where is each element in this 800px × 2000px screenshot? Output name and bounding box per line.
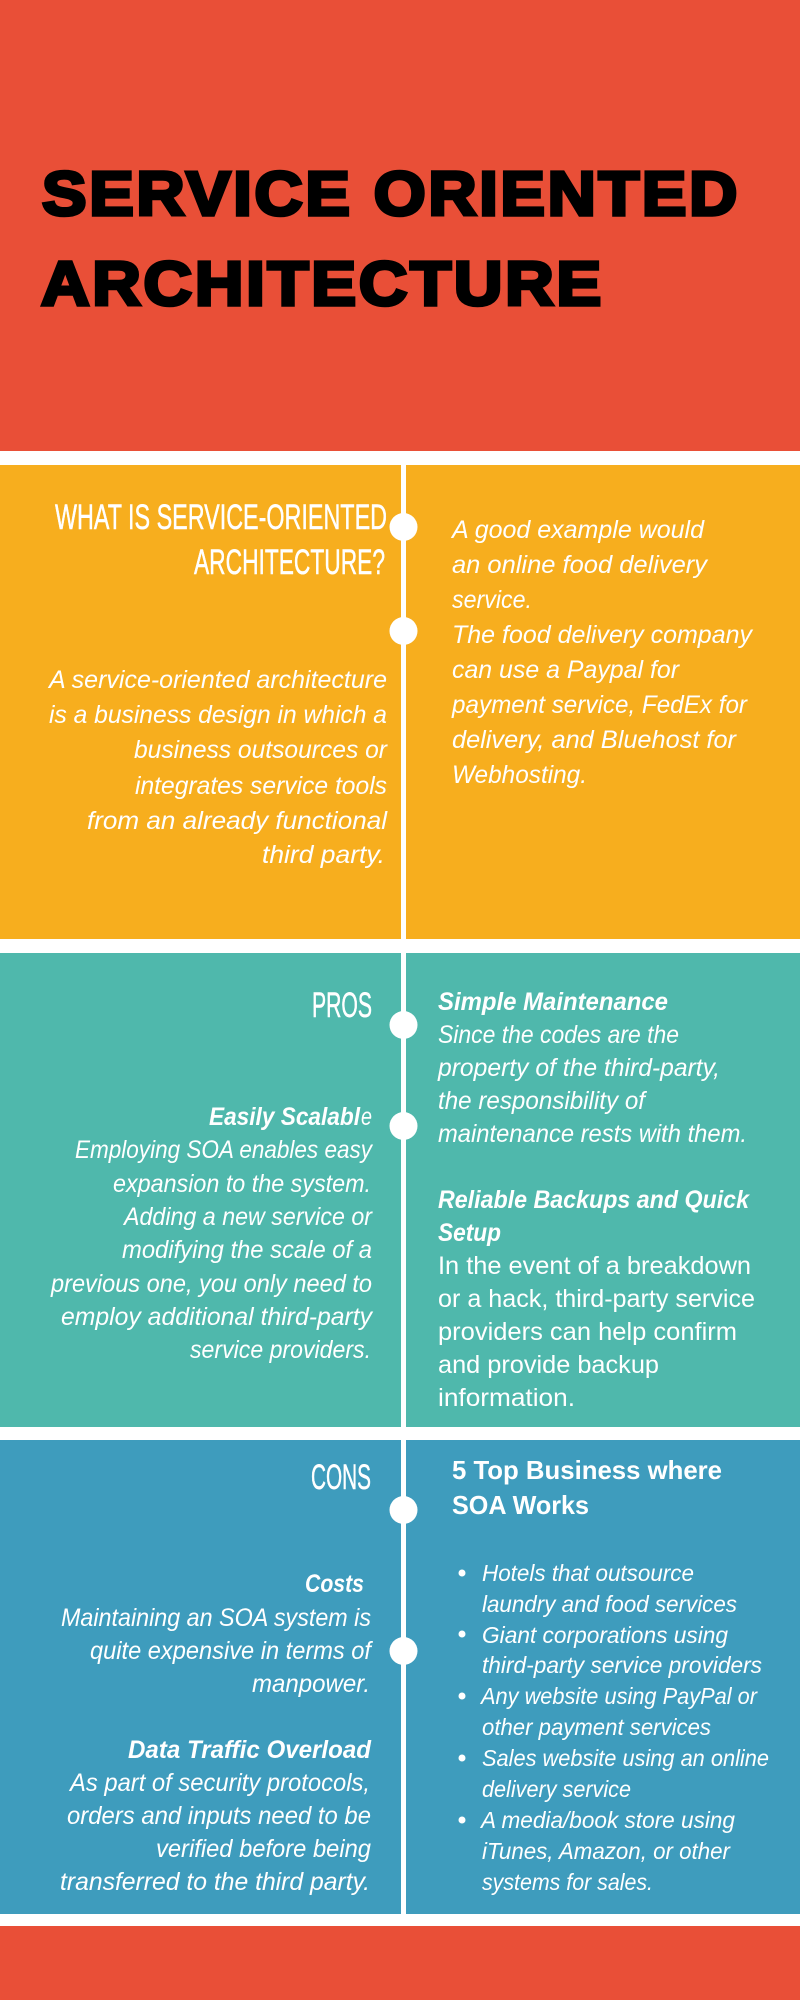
list: businesses where SOA works: A media/book store using — [479, 1807, 735, 1833]
list: businesses where SOA works: iTunes, Amazon, or other — [482, 1838, 731, 1864]
text block: costs: manpower. — [252, 1670, 370, 1698]
heading: 5 top business: SOA Works — [452, 1490, 589, 1520]
text block: food delivery example: can use a Paypal for — [452, 656, 681, 684]
text block: data traffic overload — [60, 1736, 372, 1896]
text block: reliable backups: In the event of a breakdown — [438, 1252, 751, 1280]
title text: ARCHITECTURE — [41, 250, 604, 319]
text block: food delivery example: an online food delivery — [452, 551, 709, 579]
text block: simple maintenance: Since the codes are the — [438, 1021, 679, 1049]
text block: SOA definition: business outsources or — [134, 736, 389, 764]
text block: reliable backups: providers can help confirm — [438, 1318, 737, 1346]
text block: data traffic overload: Data Traffic Overload — [128, 1736, 372, 1764]
bottom banner — [0, 1926, 800, 2000]
text block: easily scalable: e — [361, 1103, 372, 1131]
heading: 5 top business: 5 Top Business where — [452, 1455, 722, 1485]
text block: easily scalable: previous one, you only need to — [50, 1270, 372, 1298]
text block: SOA definition: from an already functional — [87, 807, 388, 835]
text block: simple maintenance: property of the third-party, — [437, 1054, 720, 1082]
text block: costs: Costs — [305, 1570, 364, 1598]
list: businesses where SOA works: Any website using PayPal or — [479, 1683, 758, 1709]
list: businesses where SOA works: delivery service — [482, 1776, 631, 1802]
text block: simple maintenance: the responsibility of — [438, 1087, 648, 1115]
list: businesses where SOA works: systems for sales. — [482, 1869, 653, 1895]
heading: what is service-oriented architecture: WHAT IS SERVICE-ORIENTED — [55, 498, 387, 537]
text block: easily scalable: Employing SOA enables easy — [75, 1136, 373, 1164]
text block: reliable backups: and provide backup — [438, 1351, 659, 1379]
text block: food delivery example: The food delivery company — [452, 621, 753, 649]
heading: pros: PROS — [312, 986, 372, 1025]
list: businesses where SOA works: Giant corporations using — [482, 1622, 728, 1648]
heading: 5 top business — [452, 1455, 722, 1520]
text block: easily scalable: modifying the scale of a — [122, 1236, 372, 1264]
text block: food delivery example — [450, 516, 753, 789]
text block: costs: quite expensive in terms of — [90, 1637, 374, 1665]
text block: food delivery example: delivery, and Bluehost for — [452, 726, 738, 754]
title text: SERVICE ORIENTED — [42, 160, 740, 229]
panel: cons, left — [0, 1440, 401, 1914]
panel: cons, right — [406, 1440, 800, 1914]
heading: cons: CONS — [311, 1458, 371, 1497]
text block: SOA definition: is a business design in which a — [49, 701, 387, 729]
text block: data traffic overload: verified before being — [156, 1835, 371, 1863]
text block: reliable backups — [438, 1186, 755, 1412]
heading: what is service-oriented architecture — [55, 498, 387, 582]
text block: SOA definition: third party. — [262, 841, 385, 869]
text block: food delivery example: service. — [452, 586, 532, 614]
text block: SOA definition — [47, 666, 389, 869]
list: businesses where SOA works — [458, 1560, 769, 1895]
panel: what is SOA, right — [406, 465, 800, 939]
list: businesses where SOA works: laundry and food services — [482, 1591, 737, 1617]
heading: what is service-oriented architecture: ARCHITECTURE? — [194, 543, 385, 582]
text block: costs: Maintaining an SOA system is — [61, 1604, 371, 1632]
text block: data traffic overload: As part of security protocols, — [68, 1769, 370, 1797]
text block: reliable backups: Reliable Backups and Quick — [438, 1186, 750, 1214]
panel: what is SOA, left — [0, 465, 401, 939]
text block: simple maintenance — [437, 988, 747, 1148]
text block: simple maintenance: Simple Maintenance — [438, 988, 668, 1016]
list: businesses where SOA works: other payment services — [482, 1714, 711, 1740]
list: businesses where SOA works: Sales website using an online — [482, 1745, 769, 1771]
text block: food delivery example: payment service, FedEx for — [451, 691, 749, 719]
text block: food delivery example: A good example would — [450, 516, 705, 544]
text block: SOA definition: integrates service tools — [135, 772, 387, 800]
text block: easily scalable: service providers. — [190, 1336, 371, 1364]
top banner with title — [0, 0, 800, 451]
text block: easily scalable: employ additional third-party — [61, 1303, 373, 1331]
text block: easily scalable — [50, 1103, 374, 1364]
text block: reliable backups: or a hack, third-party service — [438, 1285, 755, 1313]
text block: SOA definition: A service-oriented architecture — [47, 666, 387, 694]
list: businesses where SOA works: Hotels that outsource — [482, 1560, 694, 1586]
list: businesses where SOA works: third-party service providers — [482, 1652, 762, 1678]
text block: reliable backups: information. — [438, 1384, 575, 1412]
text block: costs — [61, 1570, 374, 1698]
panel: pros, right — [406, 953, 800, 1427]
text block: data traffic overload: transferred to the third party. — [60, 1868, 370, 1896]
timeline dots — [390, 513, 418, 1665]
text block: reliable backups: Setup — [438, 1219, 501, 1247]
text block: easily scalable: Adding a new service or — [122, 1203, 374, 1231]
text block: simple maintenance: maintenance rests with them. — [438, 1120, 747, 1148]
panel: pros, left — [0, 953, 401, 1427]
text block: easily scalable: Easily Scalabl — [209, 1103, 361, 1131]
text block: easily scalable: expansion to the system. — [113, 1170, 371, 1198]
title text — [41, 160, 740, 319]
text block: food delivery example: Webhosting. — [452, 761, 587, 789]
text block: data traffic overload: orders and inputs need to be — [67, 1802, 371, 1830]
